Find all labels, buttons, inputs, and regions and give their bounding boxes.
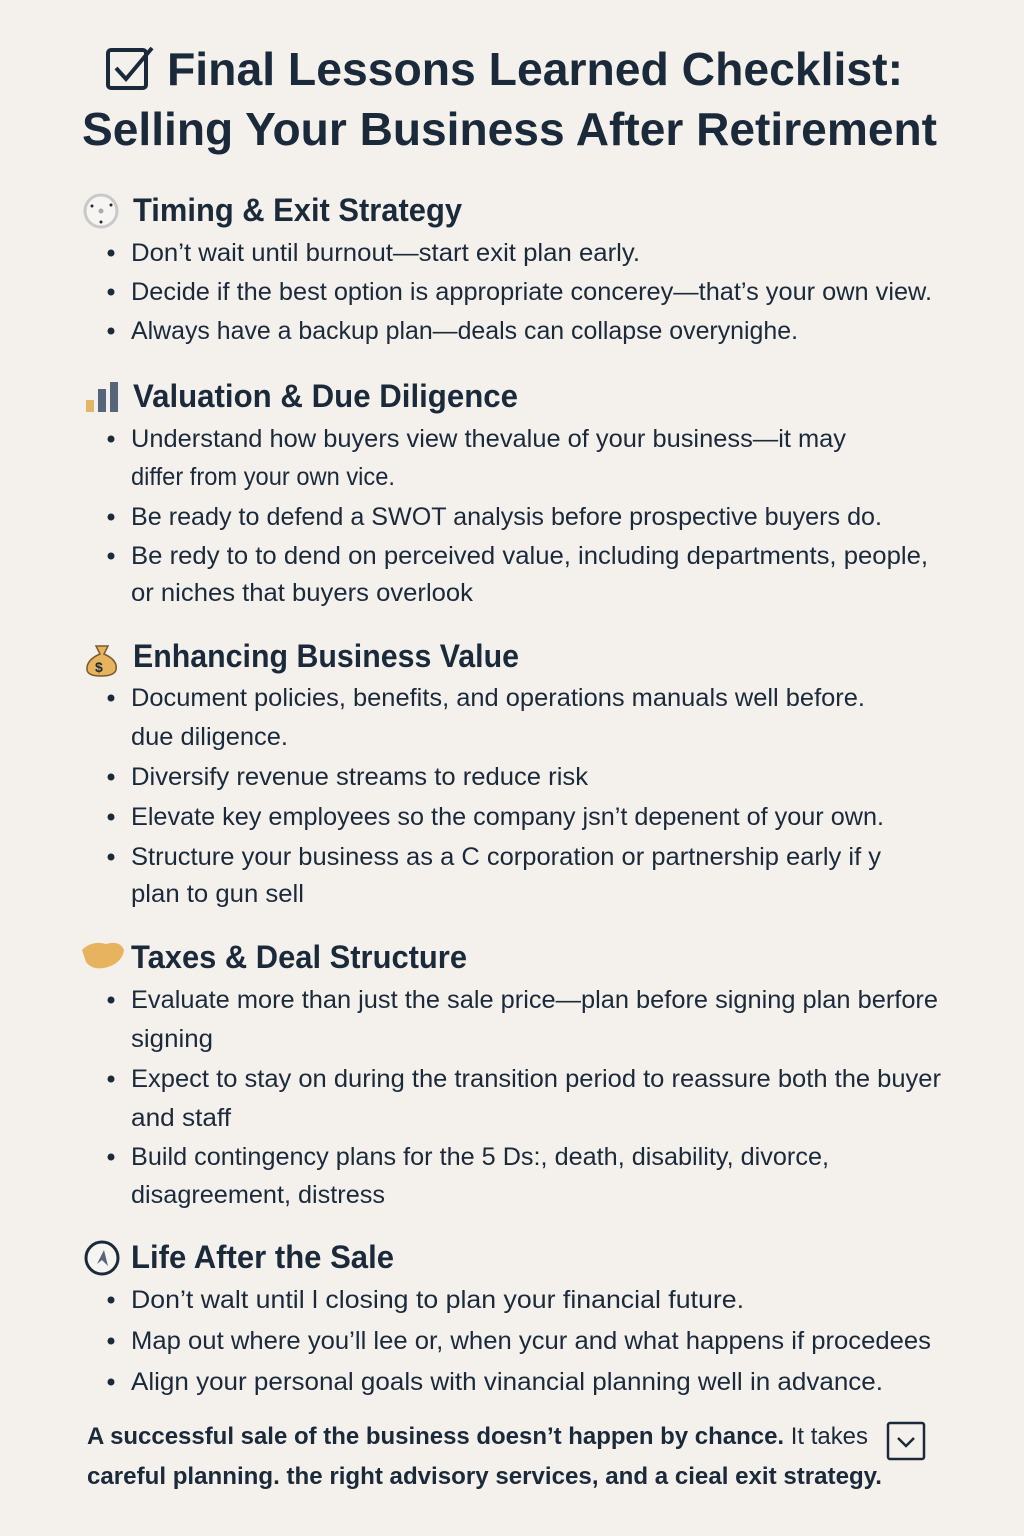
panel: life after sale (86, 1239, 931, 1396)
panel: valuation: differ from your own vice. (131, 463, 395, 491)
panel: valuation: Be redy to to dend on perceived value, including departments, people, (131, 542, 928, 570)
panel: taxes: Build contingency plans for the 5 Ds:, death, disability, divorce, (131, 1143, 829, 1171)
callout: footer: A successful sale of the business doesn’t happen by chance. It takes (87, 1423, 868, 1450)
callout: footer (87, 1423, 924, 1490)
panel: enhancing value (87, 638, 884, 908)
panel: life after sale: Life After the Sale (131, 1239, 394, 1275)
icon: handshake (82, 943, 124, 968)
panel: taxes (82, 939, 941, 1209)
panel: taxes: Taxes & Deal Structure (131, 939, 467, 975)
panel: life after sale: Don’t walt until l closing to plan your financial future. (131, 1286, 744, 1314)
panel: taxes: signing (131, 1025, 213, 1053)
icon: footer checkbox (888, 1423, 924, 1459)
panel: life after sale: Map out where you’ll lee or, when ycur and what happens if procedees (131, 1327, 931, 1355)
icon: clock (85, 195, 117, 227)
panel: valuation: or niches that buyers overlook (131, 579, 474, 607)
panel: enhancing value: Diversify revenue streams to reduce risk (131, 763, 589, 791)
title: Selling Your Business After Retirement (82, 103, 937, 155)
icon: money bag (87, 646, 116, 676)
icon: title checkbox (108, 48, 152, 88)
panel: taxes: Expect to stay on during the transition period to reassure both the buyer (131, 1065, 941, 1093)
callout: footer: careful planning. the right advisory services, and a cieal exit strategy. (87, 1463, 882, 1490)
icon: compass (86, 1242, 118, 1274)
panel: enhancing value: Structure your business as a C corporation or partnership early if y (131, 843, 882, 871)
panel: valuation (86, 378, 928, 607)
panel: timing: Timing & Exit Strategy (133, 192, 462, 228)
panel: valuation: Valuation & Due Diligence (133, 378, 518, 414)
panel: timing: Always have a backup plan—deals can collapse overynighe. (131, 317, 798, 345)
title (82, 43, 937, 155)
panel: valuation: Be ready to defend a SWOT analysis before prospective buyers do. (131, 503, 882, 531)
panel: timing: Decide if the best option is appropriate concerey—that’s your own view. (131, 278, 932, 306)
icon: money bag: $ (95, 659, 103, 675)
panel: enhancing value: plan to gun sell (131, 880, 304, 908)
panel: timing: Don’t wait until burnout—start exit plan early. (131, 239, 640, 267)
panel: enhancing value: Enhancing Business Value (133, 638, 519, 674)
panel: timing (85, 192, 932, 345)
panel: taxes: disagreement, distress (131, 1181, 385, 1209)
title: Final Lessons Learned Checklist: (167, 43, 903, 95)
panel: enhancing value: Elevate key employees so the company jsn’t depenent of your own. (131, 803, 884, 831)
panel: taxes: and staff (131, 1104, 231, 1132)
panel: enhancing value: due diligence. (131, 723, 288, 751)
panel: taxes: Evaluate more than just the sale price—plan before signing plan berfore (131, 986, 938, 1014)
panel: enhancing value: Document policies, benefits, and operations manuals well before. (131, 684, 865, 712)
panel: valuation: Understand how buyers view thevalue of your business—it may (131, 425, 847, 453)
icon: bar chart (86, 382, 118, 412)
panel: life after sale: Align your personal goals with vinancial planning well in advance. (131, 1368, 883, 1396)
